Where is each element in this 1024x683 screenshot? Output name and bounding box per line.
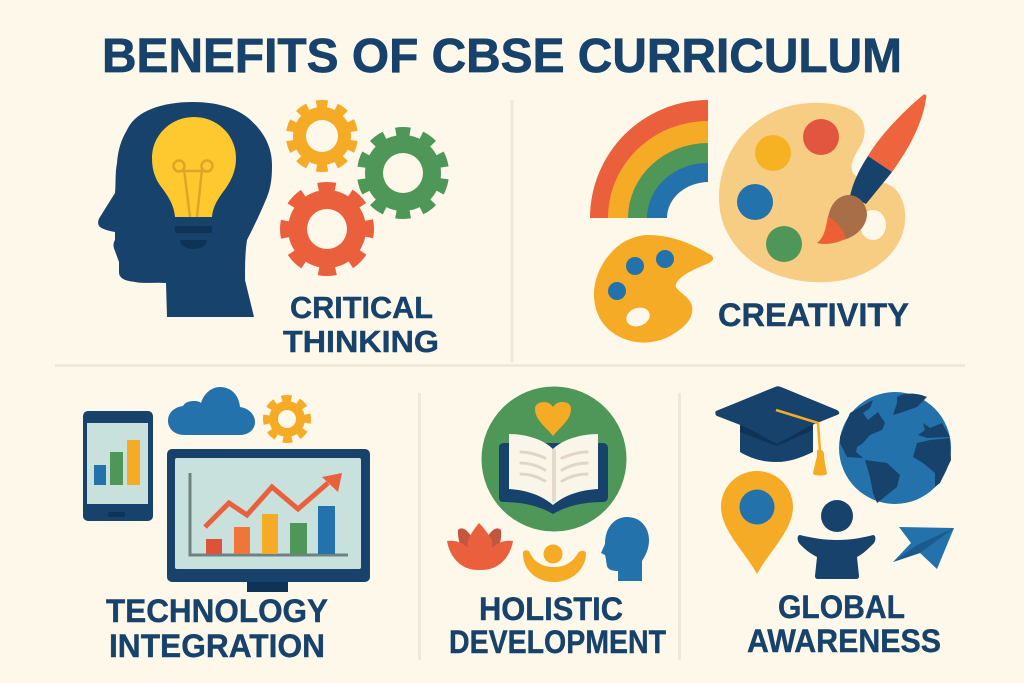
icon: book in green circle with heart [482, 386, 626, 532]
icon: orange gear [286, 100, 358, 172]
icon: cloud [168, 387, 255, 435]
label: technology integration: TECHNOLOGY [106, 593, 328, 629]
panel: global awareness [715, 386, 954, 659]
icon: blue head [601, 517, 649, 581]
icon: small palette [594, 235, 713, 343]
label: creativity: CREATIVITY [718, 297, 909, 333]
label: technology integration: INTEGRATION [109, 628, 325, 664]
icon: map pin [721, 471, 793, 574]
icon: monitor with chart [167, 449, 370, 592]
panel: holistic development [447, 386, 666, 660]
icon: paper airplane [893, 527, 954, 569]
icon: meditating figure [523, 544, 586, 582]
label: critical thinking: THINKING [283, 324, 439, 359]
icon: large palette with brush [719, 94, 926, 282]
label: holistic development: HOLISTIC [479, 591, 623, 627]
icon: red gear [277, 179, 377, 279]
label: critical thinking: CRITICAL [290, 290, 433, 325]
label: global awareness: AWARENESS [747, 623, 941, 659]
title: BENEFITS OF CBSE CURRICULUM [102, 30, 902, 83]
label: global awareness: GLOBAL [778, 589, 905, 625]
icon: green gear [356, 126, 450, 220]
icon: person with raised arms [798, 500, 875, 579]
label: critical thinking [283, 290, 439, 359]
icon: lotus [447, 523, 513, 570]
icon: small gear [263, 395, 311, 443]
icon: globe [839, 392, 951, 504]
panel: critical thinking [98, 100, 450, 359]
icon: head with light bulb [98, 102, 272, 317]
icon: tablet [83, 411, 153, 521]
label: holistic development [449, 591, 666, 660]
icon: rainbow [590, 100, 709, 218]
panel: creativity [590, 94, 926, 343]
label: technology integration [106, 593, 328, 664]
panel: technology integration [83, 387, 370, 664]
icon: graduation cap [715, 386, 839, 476]
label: holistic development: DEVELOPMENT [449, 624, 666, 660]
label: global awareness [747, 589, 941, 659]
icon: paintbrush [817, 94, 926, 244]
